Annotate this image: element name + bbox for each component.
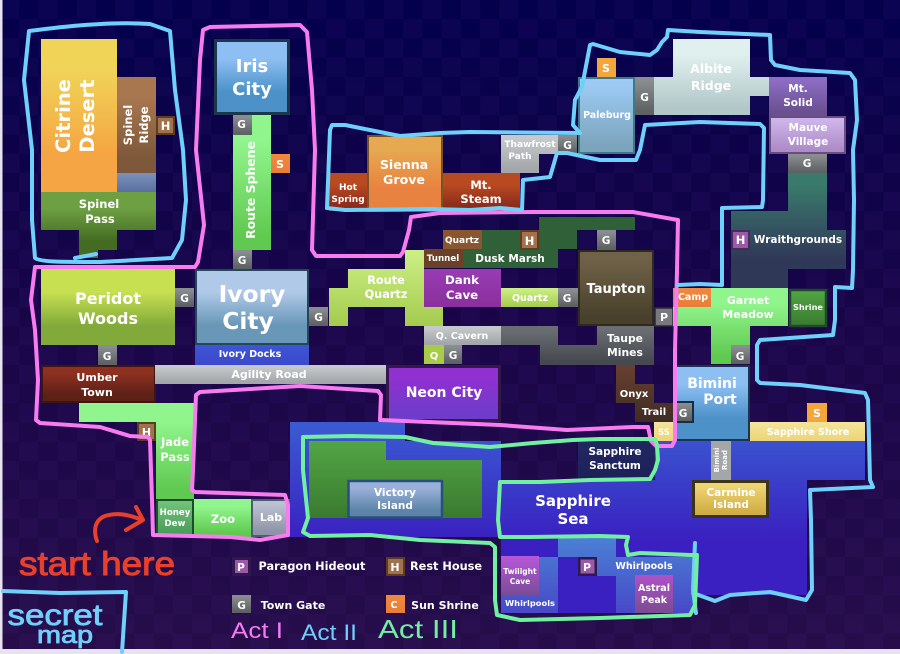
marker: Mauve gate bbox=[788, 154, 827, 173]
legend: Paragon Hideout: Paragon Hideout bbox=[259, 560, 366, 573]
region: Sapphire Sea water: Sapphire bbox=[535, 492, 611, 510]
panel: Mt. Solid: Mt. bbox=[788, 83, 808, 95]
marker: Mauve gate: G bbox=[803, 158, 811, 170]
panel: Spinel Ridge: Spinel bbox=[121, 105, 135, 145]
panel: Mt. Solid: Solid bbox=[783, 97, 813, 109]
legend: Rest House: Rest House bbox=[410, 560, 482, 573]
panel: Bimini Port: Bimini bbox=[687, 376, 737, 392]
panel: Spinel Pass: Pass bbox=[85, 212, 115, 226]
legend: Sun Shrine: Sun Shrine bbox=[411, 599, 479, 612]
panel: Victory Island: Victory bbox=[374, 487, 416, 499]
panel: Quartz Tunnel: Quartz bbox=[445, 236, 479, 246]
panel: Mt. Solid bbox=[769, 77, 827, 116]
marker: Q. Cavern gate: G bbox=[449, 350, 457, 362]
panel: Albite Ridge bbox=[654, 39, 769, 115]
panel: Mt. Steam: Mt. bbox=[470, 178, 492, 192]
panel: Zoo bbox=[194, 499, 251, 537]
panel: Twilight Cave: Cave bbox=[510, 577, 530, 586]
panel: Ivory City bbox=[196, 270, 308, 344]
legend: Rest House: H bbox=[390, 561, 400, 574]
marker: Paleburg sun shrine bbox=[597, 58, 616, 77]
panel: Iris City: City bbox=[232, 79, 272, 100]
panel: Taupe Mines: Mines bbox=[607, 346, 643, 359]
marker: Paragon hideout near Taupton: P bbox=[660, 311, 668, 324]
marker: Thawfrost gate bbox=[558, 135, 577, 154]
panel: Lab: Lab bbox=[260, 511, 282, 524]
panel: Thawfrost Path bbox=[501, 135, 558, 173]
panel: Ivory Docks bbox=[195, 345, 309, 365]
panel: Agility Road bbox=[155, 365, 386, 384]
panel: Iris City: Iris bbox=[236, 56, 268, 77]
panel: Spinel Ridge: Ridge bbox=[137, 106, 151, 144]
region: Sapphire Sea water: Sea bbox=[557, 510, 589, 528]
region: Sapphire Sea water bbox=[290, 422, 865, 613]
panel: Neon City: Neon City bbox=[406, 385, 482, 401]
panel: Dusk Marsh bbox=[463, 217, 635, 268]
panel: Sapphire Shore bbox=[750, 422, 865, 441]
annotation: secret map: map bbox=[37, 622, 93, 649]
panel: Quartz Tunnel: Tunnel bbox=[427, 254, 459, 264]
arrow: start here bbox=[95, 507, 143, 541]
marker: Ivory gate east: G bbox=[314, 312, 323, 324]
marker: Route Sphene sun shrine bbox=[271, 154, 290, 173]
panel: Agility Road: Agility Road bbox=[231, 368, 307, 381]
marker: Garnet gate: G bbox=[736, 351, 744, 363]
panel: Jade Pass: Jade bbox=[160, 435, 189, 449]
panel: Bimini Port bbox=[674, 366, 749, 440]
panel: Thawfrost Path: Thawfrost bbox=[504, 140, 556, 150]
marker: Bimini gate bbox=[674, 402, 693, 422]
panel: Honey Dew bbox=[157, 500, 193, 536]
marker: Garnet gate bbox=[731, 345, 750, 364]
marker: Route Sphene gate north: G bbox=[237, 119, 246, 131]
marker: Peridot gate east bbox=[175, 288, 194, 307]
panel: Spinel Ridge bbox=[117, 77, 156, 192]
marker: Taupton gate north bbox=[597, 230, 616, 250]
legend: Town Gate: Town Gate bbox=[261, 599, 325, 612]
panel: Thawfrost Path: Path bbox=[508, 152, 532, 162]
panel: Bimini Road: Bimini bbox=[713, 448, 721, 472]
panel: Quartz Tunnel bbox=[424, 230, 482, 268]
marker: Wraithgrounds rest house bbox=[731, 230, 750, 250]
marker: Quartz gate: G bbox=[563, 293, 571, 305]
panel: Spinel Pass: Spinel bbox=[79, 197, 119, 211]
panel: Quartz corridor: Quartz bbox=[512, 293, 548, 304]
panel: Carmine Island bbox=[694, 482, 768, 516]
panel: Citrine Desert: Citrine bbox=[52, 79, 75, 153]
panel: Sienna Grove bbox=[368, 136, 442, 211]
panel: Wraithgrounds: Wraithgrounds bbox=[754, 234, 842, 246]
panel: Ivory Docks: Ivory Docks bbox=[219, 349, 282, 360]
panel: Bimini Road bbox=[711, 441, 731, 480]
marker: Paleburg gate: G bbox=[640, 92, 649, 104]
marker: Spinel Ridge rest house bbox=[156, 116, 175, 135]
annotation: secret map bbox=[3, 591, 126, 652]
annotation: Act III label: Act III bbox=[378, 614, 458, 644]
marker: Spinel Ridge rest house: H bbox=[161, 119, 170, 133]
marker: Paragon hideout in sea: P bbox=[583, 561, 591, 574]
marker: Sapphire Shore sun shrine: S bbox=[813, 407, 821, 420]
panel: Honey Dew: Honey bbox=[160, 508, 191, 518]
panel: Neon City bbox=[388, 366, 500, 420]
panel: Wraithgrounds bbox=[731, 173, 846, 288]
panel: Mauve Village: Village bbox=[788, 136, 828, 148]
panel: Astral Peak: Peak bbox=[641, 595, 668, 606]
annotation: Act III outline bbox=[303, 436, 697, 620]
panel: Onyx Trail: Onyx bbox=[620, 389, 649, 400]
marker: SS bbox=[654, 422, 673, 441]
panel: Ivory City: Ivory bbox=[219, 280, 285, 308]
marker: Q: Q bbox=[430, 351, 438, 362]
legend: Town Gate bbox=[232, 595, 325, 613]
marker: Wraithgrounds rest house: H bbox=[736, 233, 745, 247]
marker: Q bbox=[424, 345, 444, 364]
panel: Albite Ridge: Ridge bbox=[691, 78, 731, 93]
annotation: Act II inner outline bbox=[327, 122, 764, 285]
panel: Q. Cavern bbox=[424, 326, 501, 345]
panel: Dank Cave: Dank bbox=[445, 273, 480, 287]
panel: Twilight Cave bbox=[501, 556, 539, 595]
marker: Peridot gate south: G bbox=[103, 351, 111, 363]
panel: Whirlpools bbox=[501, 538, 695, 613]
panel: Dank Cave: Cave bbox=[446, 288, 478, 302]
panel: Onyx Trail bbox=[616, 365, 673, 422]
panel: Umber Town: Umber bbox=[76, 371, 118, 384]
panel: Q. Cavern: Q. Cavern bbox=[436, 331, 488, 342]
panel: Victory Island: Island bbox=[377, 500, 413, 512]
panel: Dank Cave bbox=[424, 269, 501, 307]
panel: Astral Peak: Astral bbox=[638, 583, 670, 594]
marker: SS: SS bbox=[658, 428, 670, 438]
panel: Sienna Grove: Sienna bbox=[380, 157, 428, 172]
annotation: Act II label: Act II bbox=[301, 620, 357, 645]
panel: Paleburg bbox=[579, 78, 634, 153]
marker: Quartz gate bbox=[558, 288, 578, 307]
marker: Q. Cavern gate bbox=[444, 345, 462, 364]
panel: Iris City bbox=[216, 40, 288, 114]
panel: Garnet Meadow: Garnet bbox=[727, 294, 769, 307]
panel: Hot Spring bbox=[329, 173, 367, 211]
panel: Honey Dew: Dew bbox=[165, 519, 186, 529]
panel: Shrine bbox=[790, 290, 826, 326]
legend: Sun Shrine: C bbox=[391, 600, 398, 611]
panel: Mt. Steam: Steam bbox=[460, 192, 502, 206]
panel: Bimini Road: Road bbox=[721, 450, 729, 470]
panel: Sienna Grove: Grove bbox=[383, 172, 425, 187]
marker: Route Sphene gate north bbox=[233, 115, 252, 135]
legend: Sun Shrine bbox=[386, 595, 479, 613]
panel: Hot Spring: Hot bbox=[339, 183, 358, 193]
panel: Shrine: Shrine bbox=[793, 302, 823, 312]
panel: Mauve Village bbox=[770, 117, 845, 153]
panel: Whirlpools: Whirlpools bbox=[505, 598, 555, 608]
panel: Peridot Woods: Peridot bbox=[75, 289, 141, 308]
panel: Jade Pass bbox=[79, 403, 194, 499]
marker: Bimini gate: G bbox=[679, 408, 687, 420]
panel: Taupe Mines bbox=[501, 326, 654, 365]
panel: Astral Peak bbox=[635, 575, 673, 613]
panel: Zoo: Zoo bbox=[211, 512, 235, 526]
marker: Paragon hideout in sea bbox=[578, 557, 597, 576]
panel: Route Quartz bbox=[329, 250, 443, 326]
panel: Garnet Meadow: Meadow bbox=[722, 308, 774, 321]
annotation: citrine outline bbox=[24, 23, 186, 262]
annotation: Act I label: Act I bbox=[231, 618, 283, 643]
panel: Whirlpools: Whirlpools bbox=[615, 561, 673, 572]
panel: Victory Island bbox=[309, 441, 482, 518]
panel: Ivory City: City bbox=[222, 307, 274, 335]
panel: Peridot Woods: Woods bbox=[78, 309, 138, 328]
marker: Taupton gate north: G bbox=[602, 235, 610, 247]
marker: Dusk Marsh rest house: H bbox=[525, 234, 534, 248]
panel: Route Quartz: Quartz bbox=[365, 288, 408, 301]
marker: Sapphire Shore sun shrine bbox=[807, 403, 827, 422]
marker: Peridot gate south bbox=[98, 345, 117, 365]
panel: Carmine Island: Island bbox=[713, 499, 749, 511]
panel: Hot Spring: Spring bbox=[331, 195, 365, 205]
marker: Route Sphene gate south bbox=[233, 250, 252, 269]
marker: Ivory gate east bbox=[309, 307, 328, 326]
marker: Route Sphene gate south: G bbox=[238, 255, 246, 267]
panel: Mt. Steam bbox=[443, 173, 520, 211]
panel: Citrine Desert: Desert bbox=[76, 79, 99, 153]
panel: Garnet Meadow bbox=[673, 288, 788, 364]
panel: Onyx Trail: Trail bbox=[642, 407, 666, 418]
panel: Route Sphene bbox=[233, 115, 271, 250]
annotation: secret map: secret bbox=[8, 599, 103, 632]
marker: Dusk Marsh rest house bbox=[520, 230, 539, 250]
panel: Spinel Pass bbox=[41, 192, 156, 258]
marker: Peridot gate east: G bbox=[180, 293, 189, 305]
panel: Albite Ridge: Albite bbox=[690, 61, 732, 76]
panel: Taupton bbox=[579, 251, 653, 325]
marker: Thawfrost gate: G bbox=[563, 140, 572, 152]
panel: Taupe Mines: Taupe bbox=[607, 332, 643, 345]
panel: Carmine Island: Carmine bbox=[706, 487, 756, 499]
annotation: Act II outline bbox=[327, 30, 873, 613]
panel: Sapphire Sanctum: Sanctum bbox=[589, 460, 641, 472]
panel: Mauve Village: Mauve bbox=[789, 122, 827, 134]
panel: Quartz corridor bbox=[501, 288, 559, 307]
panel: Sapphire Sanctum: Sapphire bbox=[588, 446, 642, 458]
panel: Jade Pass: Pass bbox=[160, 450, 190, 464]
legend: Paragon Hideout bbox=[232, 557, 366, 576]
panel: Peridot Woods bbox=[41, 269, 175, 345]
marker: Route Sphene sun shrine: S bbox=[276, 158, 284, 171]
panel: Route Sphene: Route Sphene bbox=[243, 141, 258, 239]
marker: Paleburg gate bbox=[635, 77, 654, 115]
panel: Twilight Cave: Twilight bbox=[503, 567, 537, 576]
legend: Paragon Hideout: P bbox=[237, 562, 245, 574]
marker: Paleburg sun shrine: S bbox=[602, 62, 610, 75]
annotation: Act I loop bbox=[31, 25, 678, 540]
panel: Citrine Desert bbox=[41, 39, 117, 192]
annotation: start here: start here bbox=[19, 545, 175, 582]
panel: Dusk Marsh: Dusk Marsh bbox=[475, 253, 545, 265]
marker: Paragon hideout near Taupton bbox=[655, 308, 673, 326]
panel: Sapphire Shore: Sapphire Shore bbox=[767, 427, 849, 438]
marker: Camp bbox=[673, 288, 711, 307]
legend: Town Gate: G bbox=[237, 600, 246, 612]
marker: Camp: Camp bbox=[678, 292, 708, 303]
legend: Rest House bbox=[386, 557, 482, 576]
panel: Paleburg: Paleburg bbox=[583, 110, 631, 121]
panel: Taupton: Taupton bbox=[587, 282, 645, 297]
panel: Umber Town: Town bbox=[81, 386, 113, 399]
panel: Route Quartz: Route bbox=[367, 274, 405, 287]
panel: Sapphire Sanctum bbox=[578, 441, 655, 480]
marker: Jade Pass rest house: H bbox=[142, 426, 151, 439]
panel: Umber Town bbox=[42, 366, 155, 402]
panel: Lab bbox=[252, 500, 289, 536]
panel: Bimini Port: Port bbox=[703, 392, 737, 408]
marker: Jade Pass rest house bbox=[137, 422, 156, 441]
